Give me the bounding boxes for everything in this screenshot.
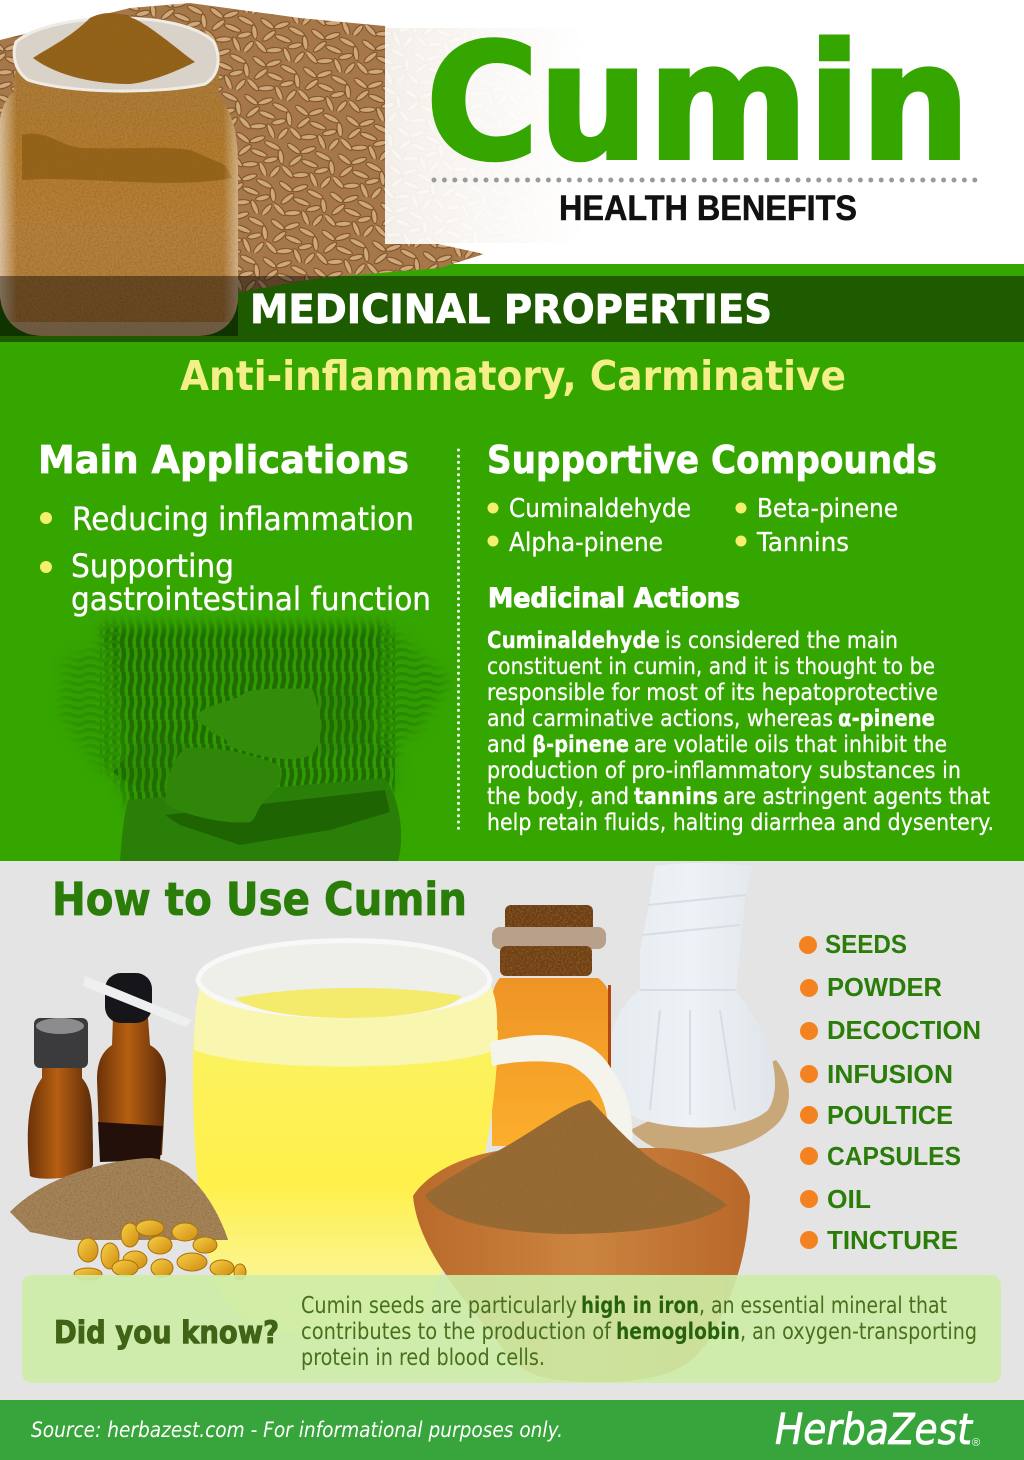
image: pale seeds behind title [385,28,585,244]
logo: HerbaZest: HerbaZest [775,1405,974,1455]
panel: medicinal properties [0,264,1024,861]
image: wooden bowl of ground cumin [413,1100,750,1382]
text block: medicinal actions: Cuminaldehyde [487,626,660,654]
text block: medicinal actions: constituent in cumin, and it is thought to be [487,652,935,680]
text block: medicinal actions: β-pinene [532,730,629,758]
text block: medicinal actions: α-pinene [838,704,935,732]
image: jar of ground cumin [0,0,240,340]
image: glass of cumin tea [193,941,632,1335]
callout text: , an essential mineral that [699,1293,947,1319]
panel: how to use cumin [0,861,1024,1400]
image: cumin seeds pile [0,3,484,264]
footer [0,1400,1024,1460]
list: applications: Reducing inflammation [72,500,414,538]
legend: forms of use: INFUSION [827,1059,953,1089]
subtitle: HEALTH BENEFITS [559,189,857,228]
text block: medicinal actions: are volatile oils that inhibit the [634,730,947,758]
text block: medicinal actions [487,626,994,836]
list: compounds: Cuminaldehyde [509,494,691,524]
list: applications: gastrointestinal function [71,580,431,618]
heading: medicinal actions: Medicinal Actions [488,583,740,614]
header panel [0,3,978,264]
callout text: , an oxygen-transporting [740,1319,977,1345]
list: compounds [488,494,898,558]
column: main applications [30,438,440,620]
list: compounds: Beta-pinene [757,494,898,524]
image: poultice in basket [609,863,789,1155]
callout text [301,1293,977,1371]
image: cumin seeds pile [10,1158,228,1240]
heading: properties list: Anti-inflammatory, Carminative [180,352,846,400]
heading: how to use: How to Use Cumin [52,873,467,926]
callout text: hemoglobin [616,1319,740,1345]
image: honey-coloured tincture bottle [492,905,611,1146]
callout: did you know [22,1275,1001,1383]
heading: main applications: Main Applications [38,438,409,482]
text block: medicinal actions: is considered the main [665,626,898,654]
text block: medicinal actions: and [487,730,526,758]
legend: forms of use: DECOCTION [827,1015,981,1045]
registered mark: ® [972,1437,980,1449]
text block: medicinal actions: and carminative actions, whereas [487,704,833,732]
dotted divider [434,178,975,182]
legend: forms of use: POULTICE [827,1100,953,1130]
image: amber dropper bottles [28,973,192,1179]
image: man holding belly [60,618,450,861]
legend: forms of use [799,929,981,1255]
callout text: Cumin seeds are particularly [301,1293,577,1319]
image: seeds over green band [238,264,452,292]
legend: forms of use: TINCTURE [827,1225,958,1255]
text block: medicinal actions: production of pro-inflammatory substances in [487,756,961,784]
callout heading: Did you know? [54,1315,279,1351]
legend: forms of use: OIL [827,1184,871,1214]
callout text: protein in red blood cells. [301,1345,545,1371]
text block: medicinal actions: the body, and [487,782,629,810]
source line: Source: herbazest.com - For informational purposes only. [31,1418,563,1442]
text block: medicinal actions: are astringent agents that [723,782,990,810]
list: applications [40,500,431,618]
legend: forms of use: SEEDS [825,929,907,959]
text block: medicinal actions: responsible for most of its hepatoprotective [487,678,938,706]
callout text: high in iron [581,1293,699,1319]
text block: medicinal actions: tannins [634,782,718,810]
list: compounds: Tannins [756,528,849,558]
legend: forms of use: POWDER [827,972,942,1002]
heading: supportive compounds: Supportive Compounds [487,438,937,482]
legend: forms of use: CAPSULES [827,1141,961,1171]
list: compounds: Alpha-pinene [509,528,663,558]
dotted column divider [457,450,460,834]
title: Cumin [426,9,970,196]
image: softgel capsules [74,1220,246,1280]
list: applications: Supporting [71,547,234,585]
column: supportive compounds [480,438,1000,840]
callout text: contributes to the production of [301,1319,612,1345]
heading: medicinal properties: MEDICINAL PROPERTIES [250,287,772,333]
section title band [0,276,1024,342]
